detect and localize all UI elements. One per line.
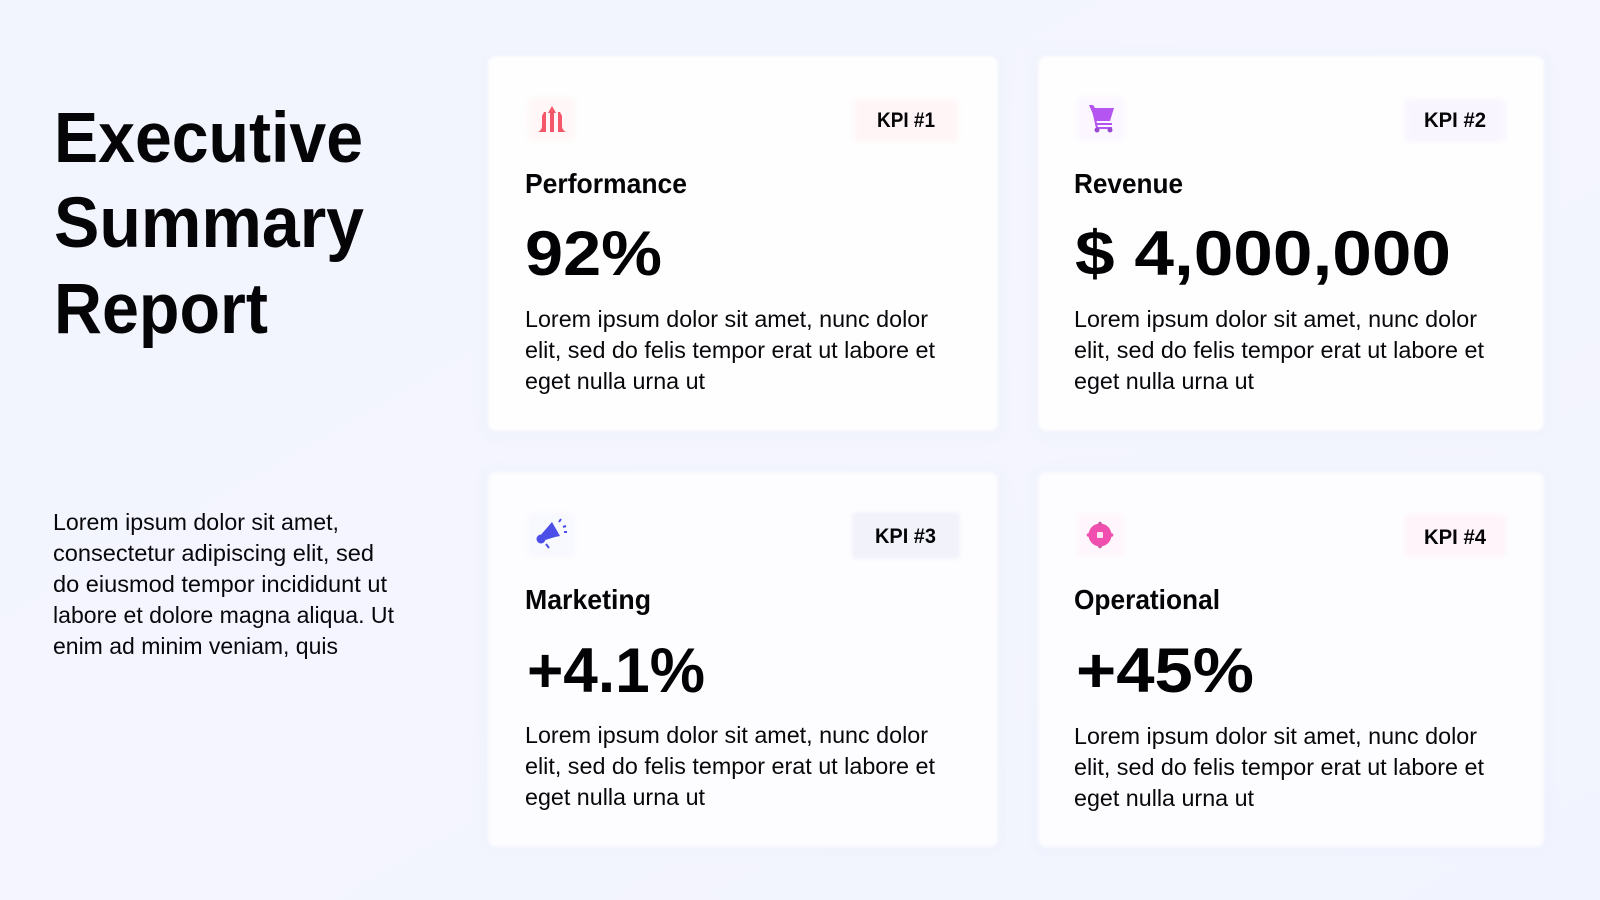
badge: KPI #4 bbox=[1424, 526, 1486, 549]
icon: shopping cart bbox=[1077, 97, 1124, 141]
intro text block: enim ad minim veniam, quis bbox=[53, 633, 338, 659]
body text bbox=[1074, 306, 1485, 394]
badge: KPI #2 bbox=[1424, 109, 1486, 132]
body text: Lorem ipsum dolor sit amet, nunc dolor bbox=[525, 722, 928, 748]
title bbox=[54, 99, 364, 349]
body text bbox=[1074, 723, 1485, 811]
panel: KPI 3 marketing bbox=[484, 470, 1002, 852]
panel: KPI 4 operational bbox=[1034, 470, 1548, 852]
badge: KPI #1 bbox=[877, 109, 935, 132]
badge: KPI #3 bbox=[875, 525, 936, 548]
badge bbox=[854, 99, 958, 142]
body text: Lorem ipsum dolor sit amet, nunc dolor bbox=[1074, 306, 1477, 332]
body text: Lorem ipsum dolor sit amet, nunc dolor bbox=[1074, 723, 1477, 749]
value: +45% bbox=[1076, 636, 1254, 706]
intro text block: Lorem ipsum dolor sit amet, bbox=[53, 509, 339, 535]
intro text block bbox=[53, 509, 395, 659]
body text: elit, sed do felis tempor erat ut labore et bbox=[1074, 754, 1485, 780]
body text: elit, sed do felis tempor erat ut labore et bbox=[525, 337, 936, 363]
body text: elit, sed do felis tempor erat ut labore et bbox=[525, 753, 936, 779]
value: 92% bbox=[525, 219, 662, 289]
badge bbox=[1404, 514, 1506, 557]
heading: Revenue bbox=[1074, 168, 1183, 199]
body text bbox=[525, 722, 936, 810]
title: Report bbox=[54, 270, 268, 349]
body text: eget nulla urna ut bbox=[1074, 368, 1255, 394]
value: +4.1% bbox=[527, 636, 705, 706]
body text bbox=[525, 306, 936, 394]
title: Summary bbox=[54, 184, 364, 263]
title: Executive bbox=[54, 99, 363, 178]
body text: Lorem ipsum dolor sit amet, nunc dolor bbox=[525, 306, 928, 332]
heading: Marketing bbox=[525, 584, 651, 615]
heading: Performance bbox=[525, 168, 687, 199]
panel: KPI 1 performance bbox=[484, 54, 1002, 436]
icon: gear bbox=[1077, 513, 1124, 557]
value: $ 4,000,000 bbox=[1075, 219, 1451, 289]
intro text block: consectetur adipiscing elit, sed bbox=[53, 540, 374, 566]
icon: rising arrows bbox=[528, 97, 575, 141]
badge bbox=[852, 512, 960, 559]
heading: Operational bbox=[1074, 584, 1220, 615]
body text: eget nulla urna ut bbox=[525, 784, 706, 810]
panel: KPI 2 revenue bbox=[1034, 54, 1548, 436]
body text: eget nulla urna ut bbox=[1074, 785, 1255, 811]
intro text block: labore et dolore magna aliqua. Ut bbox=[53, 602, 395, 628]
body text: eget nulla urna ut bbox=[525, 368, 706, 394]
badge bbox=[1404, 99, 1506, 142]
body text: elit, sed do felis tempor erat ut labore et bbox=[1074, 337, 1485, 363]
icon: megaphone bbox=[528, 513, 575, 557]
intro text block: do eiusmod tempor incididunt ut bbox=[53, 571, 388, 597]
